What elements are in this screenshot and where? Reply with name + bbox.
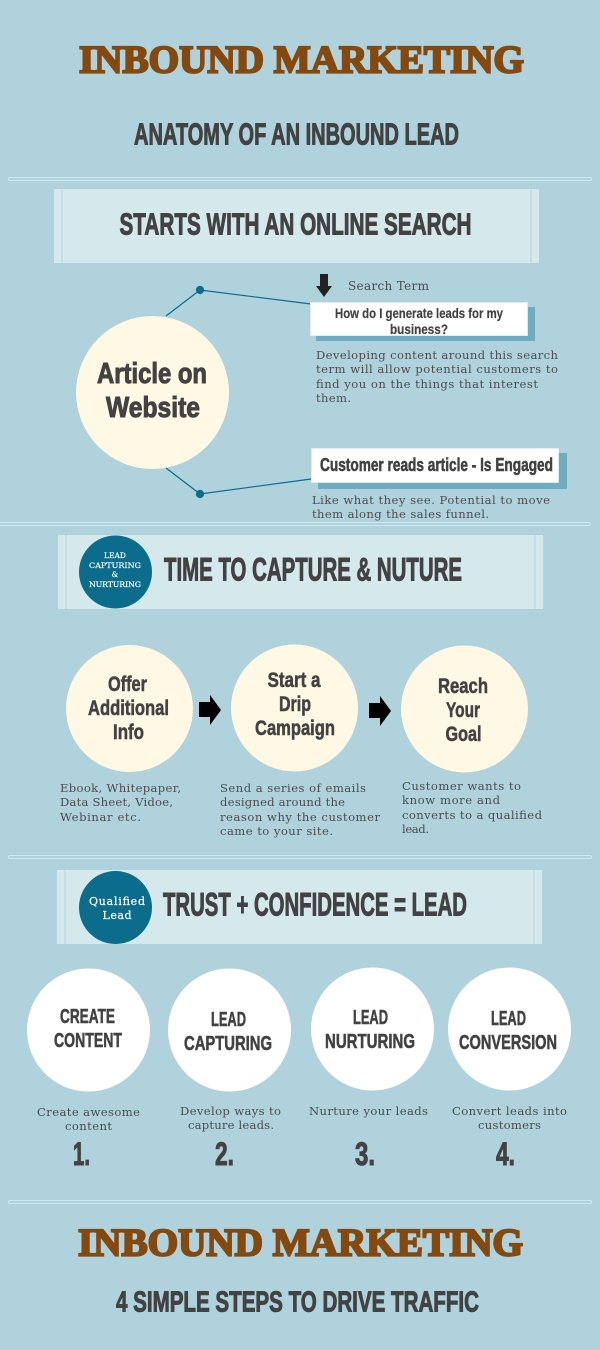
arrow 2 <box>369 696 391 726</box>
number 3: 3. <box>355 1136 375 1172</box>
text: drip description: Send a series of emails <box>220 781 366 795</box>
text: offer description: Webinar etc. <box>60 810 141 824</box>
closing title: INBOUND MARKETING <box>78 1222 523 1264</box>
panel: qualified lead <box>57 870 542 944</box>
circle: article on website <box>76 316 229 469</box>
number 2: 2. <box>215 1136 234 1172</box>
text: step 3 description: Nurture your leads <box>309 1104 428 1118</box>
text: step 1 description: Create awesome <box>37 1105 140 1119</box>
step 4: lead conversion: CONVERSION <box>459 1032 557 1054</box>
step: drip campaign <box>231 644 358 772</box>
step 4: lead conversion <box>448 968 571 1090</box>
step 2: lead capturing: CAPTURING <box>184 1033 272 1055</box>
callout: customer engaged <box>312 448 567 489</box>
text: engaged explanation: Like what they see. Potential to move <box>312 493 550 507</box>
step: offer additional info <box>66 645 193 772</box>
text: step 4 description: customers <box>478 1118 541 1132</box>
panel: capture and nurture <box>58 535 543 609</box>
step 4: lead conversion: LEAD <box>491 1008 526 1030</box>
badge: lead capturing and nurturing: LEAD <box>104 551 126 560</box>
step: reach your goal <box>401 646 528 772</box>
search term label: Search Term <box>348 279 430 293</box>
badge: lead capturing and nurturing: CAPTURING <box>89 561 141 570</box>
title: INBOUND MARKETING <box>79 38 524 82</box>
text: goal description: Customer wants to <box>402 779 521 793</box>
text: step 1 description <box>37 1105 140 1133</box>
text: step 2 description <box>180 1104 281 1132</box>
text: step 1 description: content <box>65 1119 112 1133</box>
badge: lead capturing and nurturing: & <box>112 570 119 579</box>
step 2: lead capturing: LEAD <box>211 1009 246 1031</box>
text: search term explanation: term will allow potential customers to <box>316 362 558 376</box>
badge: qualified lead <box>79 871 152 944</box>
step: offer additional info: Additional <box>88 697 169 720</box>
connector lines <box>166 286 311 498</box>
text: goal description: converts to a qualified <box>402 808 543 822</box>
text: drip description: came to your site. <box>220 824 333 838</box>
step 2: lead capturing <box>168 968 291 1092</box>
text: offer description: Ebook, Whitepaper, <box>60 781 181 795</box>
step: reach your goal: Your <box>446 699 480 722</box>
step: reach your goal: Goal <box>446 723 482 746</box>
text: drip description: designed around the <box>220 795 345 809</box>
number 4: 4. <box>496 1136 515 1172</box>
step: offer additional info: Offer <box>108 673 147 696</box>
number 1: 1. <box>73 1136 90 1172</box>
step: drip campaign: Start a <box>268 669 321 692</box>
text: goal description: lead. <box>402 822 429 836</box>
text: search term explanation: Developing content around this search <box>316 348 559 362</box>
callout: search question: business? <box>390 321 448 337</box>
badge: lead capturing and nurturing: NURTURING <box>89 580 141 589</box>
step: drip campaign: Drip <box>279 693 311 716</box>
text: goal description: know more and <box>402 793 501 807</box>
step 1: create content: CREATE <box>60 1006 115 1028</box>
step: drip campaign: Campaign <box>255 717 335 740</box>
text: search term explanation <box>316 348 559 405</box>
text: step 2 description: Develop ways to <box>180 1104 281 1118</box>
step 1: create content <box>27 968 150 1092</box>
text: step 2 description: capture leads. <box>188 1118 274 1132</box>
badge: lead capturing and nurturing <box>79 536 152 608</box>
step 3: lead nurturing <box>311 968 434 1090</box>
step: offer additional info: Info <box>113 721 144 744</box>
circle: article on website: Website <box>106 392 200 424</box>
callout: search question <box>310 302 535 341</box>
text: search term explanation: them. <box>316 391 351 405</box>
text: goal description <box>402 779 543 836</box>
text: engaged explanation <box>312 493 550 521</box>
text: offer description <box>60 781 181 824</box>
step 3: lead nurturing: NURTURING <box>325 1031 415 1053</box>
text: offer description: Data Sheet, Vidoe, <box>60 795 173 809</box>
icon: down arrow <box>316 274 332 297</box>
arrow 1 <box>199 695 221 725</box>
text: engaged explanation: them along the sales funnel. <box>312 507 489 521</box>
text: step 4 description <box>452 1104 567 1132</box>
badge: qualified lead: Qualified <box>89 895 145 908</box>
badge: qualified lead: Lead <box>102 909 132 922</box>
text: search term explanation: find you on the things that interest <box>316 377 538 391</box>
text: step 4 description: Convert leads into <box>452 1104 567 1118</box>
text: drip description: reason why the customer <box>220 810 380 824</box>
text: drip description <box>220 781 380 838</box>
panel: online search <box>54 189 539 263</box>
circle: article on website: Article on <box>97 358 207 390</box>
callout: search question: How do I generate leads for my <box>335 305 503 321</box>
step 1: create content: CONTENT <box>54 1030 122 1052</box>
step: reach your goal: Reach <box>438 675 488 698</box>
step 3: lead nurturing: LEAD <box>353 1007 388 1029</box>
